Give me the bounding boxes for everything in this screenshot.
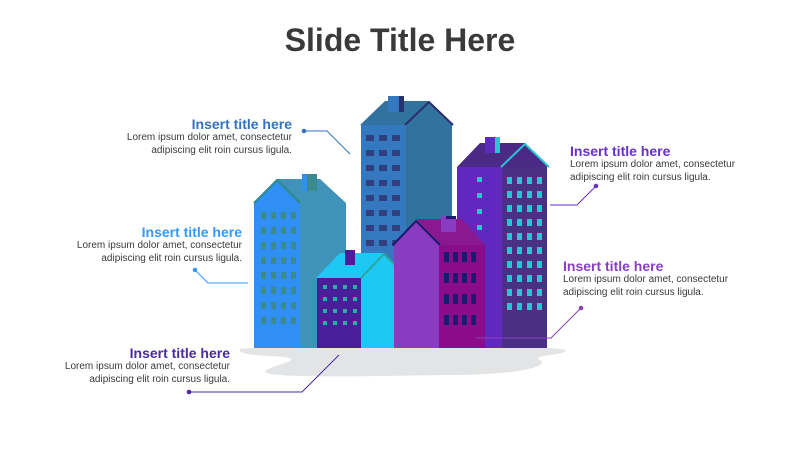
text block: bottom-left: Lorem ipsum dolor amet, consectetur <box>65 361 230 372</box>
title: Slide Title Here <box>285 22 515 58</box>
building A <box>254 174 346 348</box>
text block: top-left <box>127 116 292 156</box>
text block: mid-left <box>77 224 242 264</box>
text block: top-right: Insert title here <box>570 143 670 159</box>
text block: top-right: Lorem ipsum dolor amet, consectetur <box>570 159 735 170</box>
text block: top-left: adipiscing elit roin cursus ligula. <box>151 144 292 156</box>
text block: top-right: adipiscing elit roin cursus ligula. <box>570 172 711 182</box>
connector: mid-left <box>193 268 248 283</box>
text block: mid-left: adipiscing elit roin cursus ligula. <box>101 252 242 264</box>
building E <box>393 216 485 348</box>
text block: bottom-left: adipiscing elit roin cursus ligula. <box>89 374 230 384</box>
building D <box>316 250 408 348</box>
text block: bottom-right: adipiscing elit roin cursus ligula. <box>563 286 704 298</box>
connector: bottom-left <box>187 355 339 394</box>
text block: bottom-left: Insert title here <box>130 345 230 361</box>
text block: mid-left: Lorem ipsum dolor amet, consectetur <box>77 240 242 251</box>
text block: bottom-right <box>563 258 728 298</box>
text block: bottom-right: Insert title here <box>563 258 663 274</box>
text block: top-left: Lorem ipsum dolor amet, consectetur <box>127 132 292 143</box>
building C <box>457 137 549 348</box>
connector: top-right <box>550 184 598 205</box>
connector: bottom-right <box>476 306 583 338</box>
connector: top-left <box>302 129 350 154</box>
text block: top-left: Insert title here <box>192 116 292 132</box>
text block: mid-left: Insert title here <box>142 224 242 240</box>
ground shadow <box>240 346 565 376</box>
text block: top-right <box>570 143 735 182</box>
building B <box>360 96 453 348</box>
text block: bottom-left <box>65 345 230 384</box>
text block: bottom-right: Lorem ipsum dolor amet, consectetur <box>563 274 728 285</box>
